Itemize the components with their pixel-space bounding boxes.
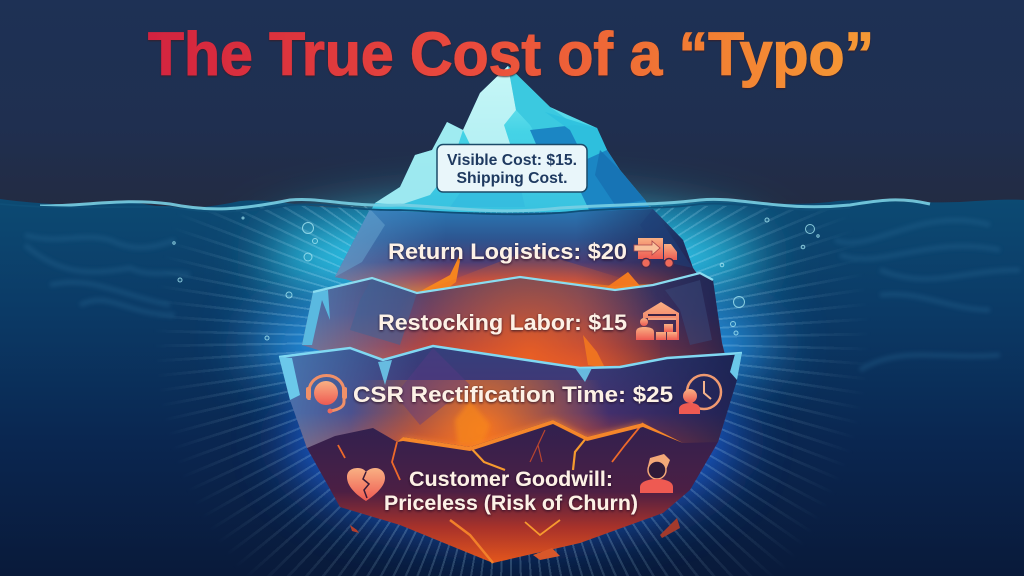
- water surface line: [0, 199, 930, 214]
- icon: upset customer: [640, 454, 673, 493]
- tier 4: customer goodwill: [307, 420, 718, 563]
- callout: visible cost: [437, 144, 587, 192]
- callout: visible cost: Visible Cost: $15.: [447, 152, 577, 169]
- icon: broken heart: [347, 468, 385, 501]
- iceberg tip above water: [370, 66, 652, 212]
- background sky: [0, 0, 1024, 210]
- tier 3: CSR rectification time: [279, 346, 742, 480]
- label: return logistics: Return Logistics: $20: [388, 239, 627, 264]
- icon: headset agent: [306, 376, 347, 414]
- light halo behind iceberg: [247, 210, 777, 530]
- bubbles: [173, 217, 819, 340]
- title: The True Cost of a “Typo”: [148, 20, 874, 88]
- label: customer goodwill: Priceless (Risk of Churn): [384, 492, 638, 515]
- callout: visible cost: Shipping Cost.: [456, 170, 568, 187]
- ocean water: [0, 199, 1024, 576]
- label: customer goodwill: Customer Goodwill:: [409, 468, 613, 491]
- subsurface wave patterns: [25, 220, 1020, 370]
- label: customer goodwill: [384, 468, 638, 515]
- underwater light rays: [186, 206, 838, 576]
- label: CSR rectification time: CSR Rectification Time: $25: [353, 382, 673, 407]
- icon: delivery truck: [634, 238, 677, 268]
- icon: person with clock: [679, 375, 721, 414]
- tier 2: restocking labor: [302, 250, 730, 375]
- icon: warehouse worker: [636, 302, 679, 340]
- label: restocking labor: Restocking Labor: $15: [378, 310, 627, 335]
- tier 1: return logistics: [335, 209, 705, 295]
